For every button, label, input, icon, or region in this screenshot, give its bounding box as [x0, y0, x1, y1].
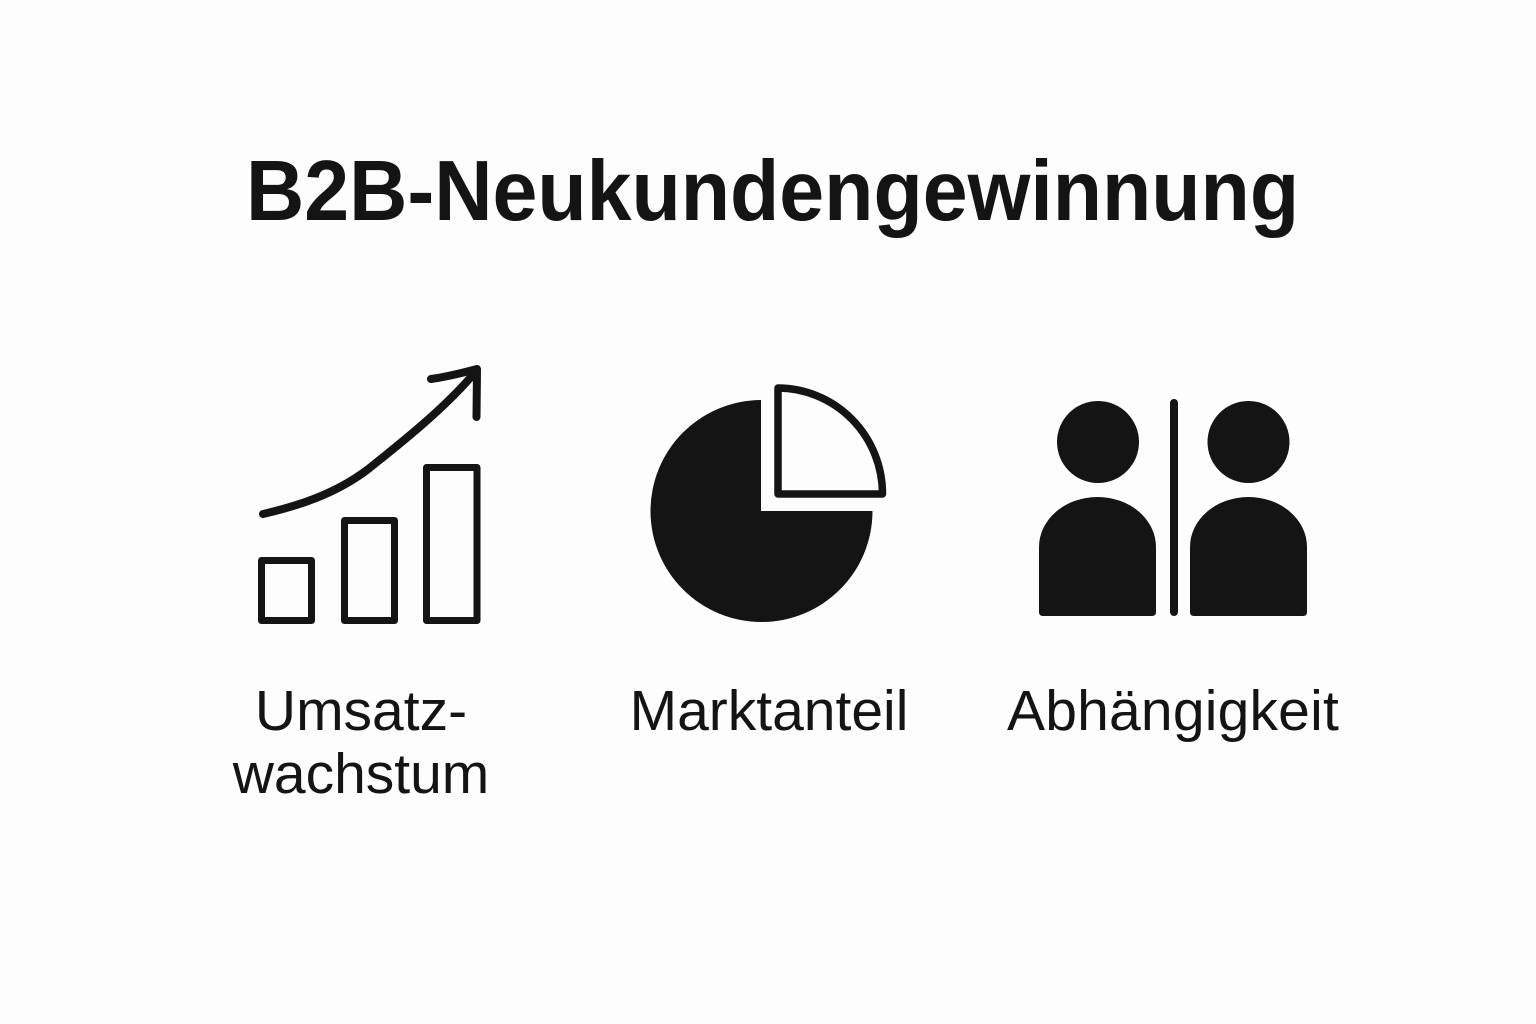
label: Umsatzwachstum: wachstum — [233, 742, 489, 806]
icon: two people with divider — [1039, 399, 1307, 616]
person left — [1039, 401, 1156, 616]
divider — [1170, 399, 1178, 616]
icon: growth chart with arrow — [258, 365, 481, 624]
pie main — [651, 400, 872, 622]
label: Umsatzwachstum — [232, 679, 489, 806]
person right — [1190, 401, 1307, 616]
bar medium — [344, 520, 394, 620]
label: Marktanteil: Marktanteil — [630, 679, 908, 743]
title: B2B-Neukundengewinnung — [246, 144, 1299, 239]
bar small — [262, 560, 312, 620]
icon: pie chart — [650, 384, 886, 622]
bar large — [426, 468, 477, 620]
pie slice — [778, 388, 882, 494]
arrow — [263, 369, 477, 514]
label: Abhängigkeit: Abhängigkeit — [1007, 679, 1339, 743]
label: Umsatzwachstum: Umsatz- — [255, 679, 467, 743]
